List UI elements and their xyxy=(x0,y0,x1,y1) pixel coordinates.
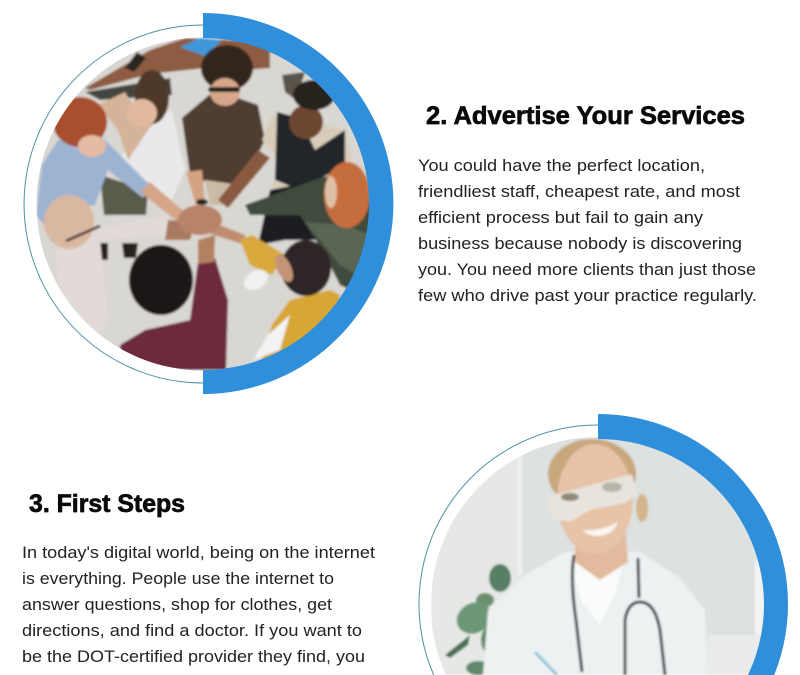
blue half ring xyxy=(598,414,788,675)
text block: advertise your services: few who drive past your practice regularly. xyxy=(418,287,757,305)
text block: advertise your services xyxy=(418,157,757,305)
blue half ring xyxy=(203,13,393,394)
thin ring xyxy=(419,425,598,675)
text block: advertise your services: You could have the perfect location, xyxy=(418,157,705,175)
text block: first steps: is everything. People use the internet to xyxy=(22,570,334,588)
text block: first steps: In today's digital world, being on the internet xyxy=(22,544,375,562)
text block: advertise your services: business because nobody is discovering xyxy=(418,235,742,253)
heading: first steps: 3. First Steps xyxy=(29,490,185,518)
photo: smiling doctor xyxy=(431,437,765,675)
text block: advertise your services: efficient process but fail to gain any xyxy=(418,209,704,227)
text block: first steps: be the DOT-certified provider they find, you xyxy=(22,648,365,666)
heading: advertise your services: 2. Advertise Your Services xyxy=(426,102,745,130)
text block: advertise your services: friendliest staff, cheapest rate, and most xyxy=(418,183,740,201)
text block: advertise your services: you. You need more clients than just those xyxy=(418,261,756,279)
thin ring xyxy=(24,25,203,383)
panel: section 2 photo ring xyxy=(24,13,393,394)
photo: team stacking hands xyxy=(36,38,375,371)
text block: first steps xyxy=(22,544,375,666)
text block: first steps: answer questions, shop for clothes, get xyxy=(22,596,332,614)
text block: first steps: directions, and find a doctor. If you want to xyxy=(22,622,362,640)
panel: section 3 photo ring xyxy=(419,414,788,675)
